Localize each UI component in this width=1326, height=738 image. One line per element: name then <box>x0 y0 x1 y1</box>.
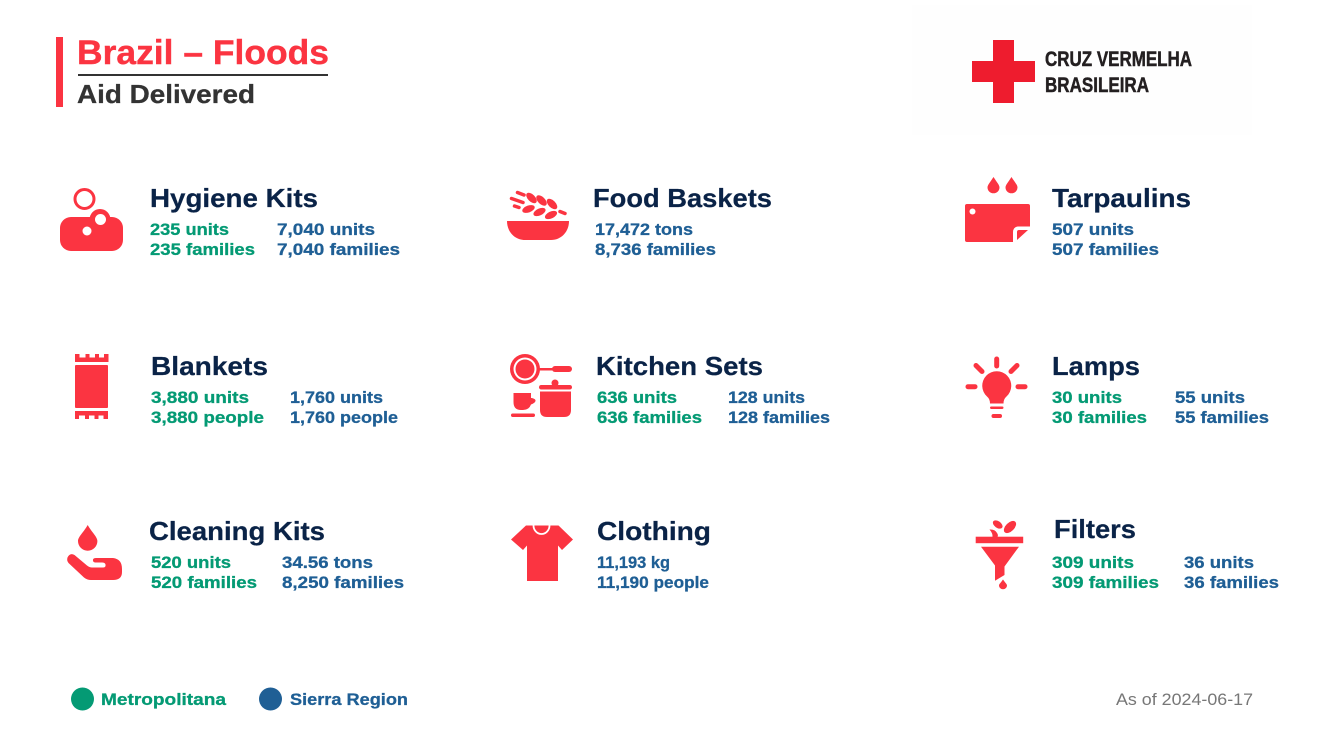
Sierra Region figures: 36 families <box>1184 573 1279 592</box>
heading: Filters <box>1054 514 1136 544</box>
heading: Hygiene Kits <box>150 183 318 213</box>
Metropolitana figures: 520 families <box>151 573 257 592</box>
panel: clothing <box>511 516 711 592</box>
icon: blanket <box>75 354 108 419</box>
Metropolitana figures: 636 families <box>597 408 702 427</box>
icon: soap <box>60 190 123 251</box>
Sierra Region figures <box>1184 553 1279 592</box>
Metropolitana figures: 235 units <box>150 220 229 239</box>
Sierra Region figures: 55 families <box>1175 408 1269 427</box>
Sierra Region figures: 55 units <box>1175 388 1245 407</box>
Metropolitana figures: 309 families <box>1052 573 1159 592</box>
legend: Metropolitana <box>71 688 227 710</box>
Metropolitana figures: 309 units <box>1052 553 1134 572</box>
panel: hygiene kits <box>60 183 400 259</box>
Sierra Region figures: 1,760 units <box>290 388 383 407</box>
Sierra Region figures <box>597 553 709 592</box>
heading: Kitchen Sets <box>596 351 763 381</box>
Metropolitana figures <box>1052 388 1147 427</box>
heading: Lamps <box>1052 351 1140 381</box>
panel: tarpaulins <box>965 177 1191 259</box>
title block <box>56 34 329 109</box>
panel: food baskets <box>507 183 772 259</box>
Sierra Region figures <box>728 388 830 427</box>
Sierra Region figures: 17,472 tons <box>595 220 693 239</box>
date note: As of 2024-06-17 <box>1116 690 1253 709</box>
icon: light bulb <box>968 359 1025 418</box>
Metropolitana figures <box>151 553 257 592</box>
Metropolitana figures: 3,880 units <box>151 388 249 407</box>
legend: Sierra Region <box>259 688 408 710</box>
Metropolitana figures <box>1052 553 1159 592</box>
subtitle: Aid Delivered <box>77 79 255 109</box>
legend: Sierra Region: Sierra Region <box>290 690 408 709</box>
Metropolitana figures: 3,880 people <box>151 408 264 427</box>
logo: Cruz Vermelha Brasileira: BRASILEIRA <box>1045 74 1149 97</box>
Sierra Region figures <box>282 553 404 592</box>
Sierra Region figures: 128 units <box>728 388 805 407</box>
Sierra Region figures <box>290 388 398 427</box>
Sierra Region figures: 7,040 families <box>277 240 400 259</box>
icon: tarpaulin with rain drops <box>965 177 1031 243</box>
icon: pan, pot and cup <box>510 354 572 417</box>
Sierra Region figures <box>277 220 400 259</box>
heading: Food Baskets <box>593 183 772 213</box>
panel: blankets <box>75 351 398 427</box>
heading: Tarpaulins <box>1052 183 1191 213</box>
Metropolitana figures <box>150 220 255 259</box>
Sierra Region figures: 34.56 tons <box>282 553 373 572</box>
Sierra Region figures: 507 units <box>1052 220 1134 239</box>
icon: hand with drop <box>67 525 122 580</box>
Metropolitana figures: 520 units <box>151 553 231 572</box>
Sierra Region figures: 507 families <box>1052 240 1159 259</box>
Sierra Region figures: 7,040 units <box>277 220 375 239</box>
Sierra Region figures <box>595 220 716 259</box>
Metropolitana figures: 636 units <box>597 388 677 407</box>
Sierra Region figures: 11,193 kg <box>597 553 670 572</box>
panel: lamps <box>968 351 1269 427</box>
logo: Cruz Vermelha Brasileira <box>912 5 1252 135</box>
icon: t-shirt <box>511 526 573 581</box>
logo: Cruz Vermelha Brasileira: CRUZ VERMELHA <box>1045 48 1192 71</box>
Sierra Region figures <box>1175 388 1269 427</box>
Sierra Region figures: 36 units <box>1184 553 1254 572</box>
Metropolitana figures: 235 families <box>150 240 255 259</box>
Sierra Region figures: 1,760 people <box>290 408 398 427</box>
Metropolitana figures <box>151 388 264 427</box>
Metropolitana figures: 30 units <box>1052 388 1122 407</box>
panel: cleaning kits <box>67 516 404 592</box>
Sierra Region figures <box>1052 220 1159 259</box>
legend <box>71 688 408 710</box>
Sierra Region figures: 8,250 families <box>282 573 404 592</box>
Metropolitana figures: 30 families <box>1052 408 1147 427</box>
Metropolitana figures <box>597 388 702 427</box>
title accent bar <box>56 37 63 107</box>
Sierra Region figures: 128 families <box>728 408 830 427</box>
legend: Metropolitana: Metropolitana <box>101 690 227 709</box>
title: Brazil – Floods <box>77 34 329 72</box>
Sierra Region figures: 11,190 people <box>597 573 709 592</box>
icon: funnel <box>976 519 1023 589</box>
panel: filters <box>976 514 1279 592</box>
heading: Cleaning Kits <box>149 516 325 546</box>
icon: grain bowl <box>507 191 569 240</box>
Sierra Region figures: 8,736 families <box>595 240 716 259</box>
heading: Blankets <box>151 351 268 381</box>
panel: kitchen sets <box>510 351 830 427</box>
heading: Clothing <box>597 516 711 546</box>
